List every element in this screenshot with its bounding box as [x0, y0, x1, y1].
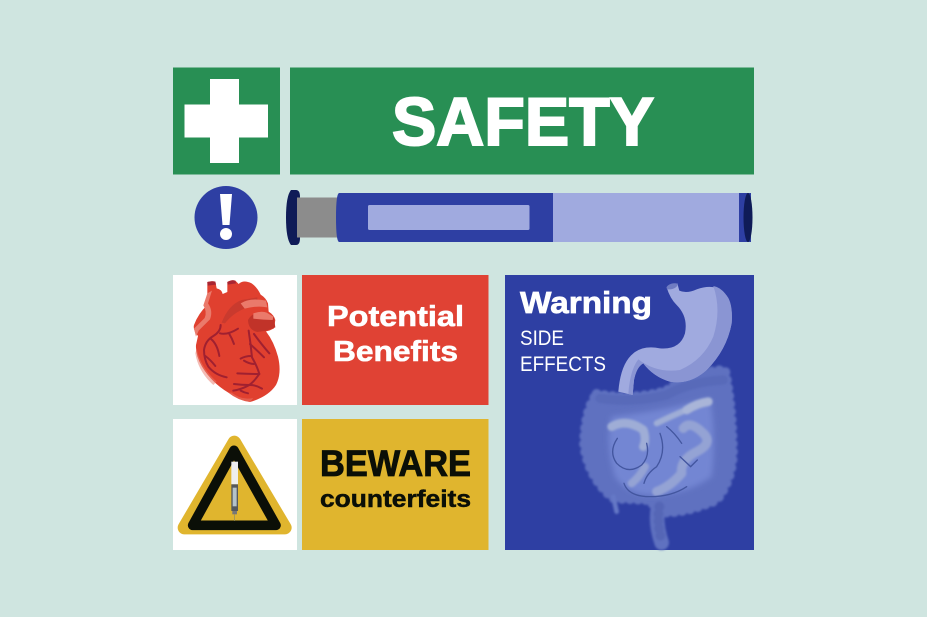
- icon: heart: [194, 280, 280, 402]
- heading: safety banner: SAFETY: [392, 84, 654, 160]
- panel: potential benefits: Benefits: [333, 336, 458, 368]
- text: side effects: SIDE: [520, 327, 564, 350]
- text: warning: Warning: [520, 285, 652, 320]
- panel: warning triangle: [173, 419, 297, 550]
- heading: safety banner: [290, 68, 754, 174]
- panel: warning side effects: [505, 275, 754, 550]
- icon: exclamation mark: [194, 186, 258, 249]
- panel: potential benefits: [302, 275, 488, 405]
- panel: beware counterfeits: counterfeits: [320, 486, 471, 513]
- panel: beware counterfeits: BEWARE: [320, 444, 471, 484]
- icon: warning triangle with pen: [184, 442, 285, 528]
- panel: beware counterfeits: [302, 419, 488, 550]
- text: side effects: EFFECTS: [520, 353, 606, 376]
- icon: stomach: [618, 282, 732, 395]
- panel: heart: [173, 275, 297, 405]
- inner cavity: [609, 398, 714, 495]
- panel: first aid cross: [173, 68, 280, 174]
- icon: intestines: [584, 370, 733, 543]
- text: side effects: [520, 327, 606, 376]
- icon: injection pen: [286, 190, 752, 245]
- panel: potential benefits: Potential: [327, 301, 464, 333]
